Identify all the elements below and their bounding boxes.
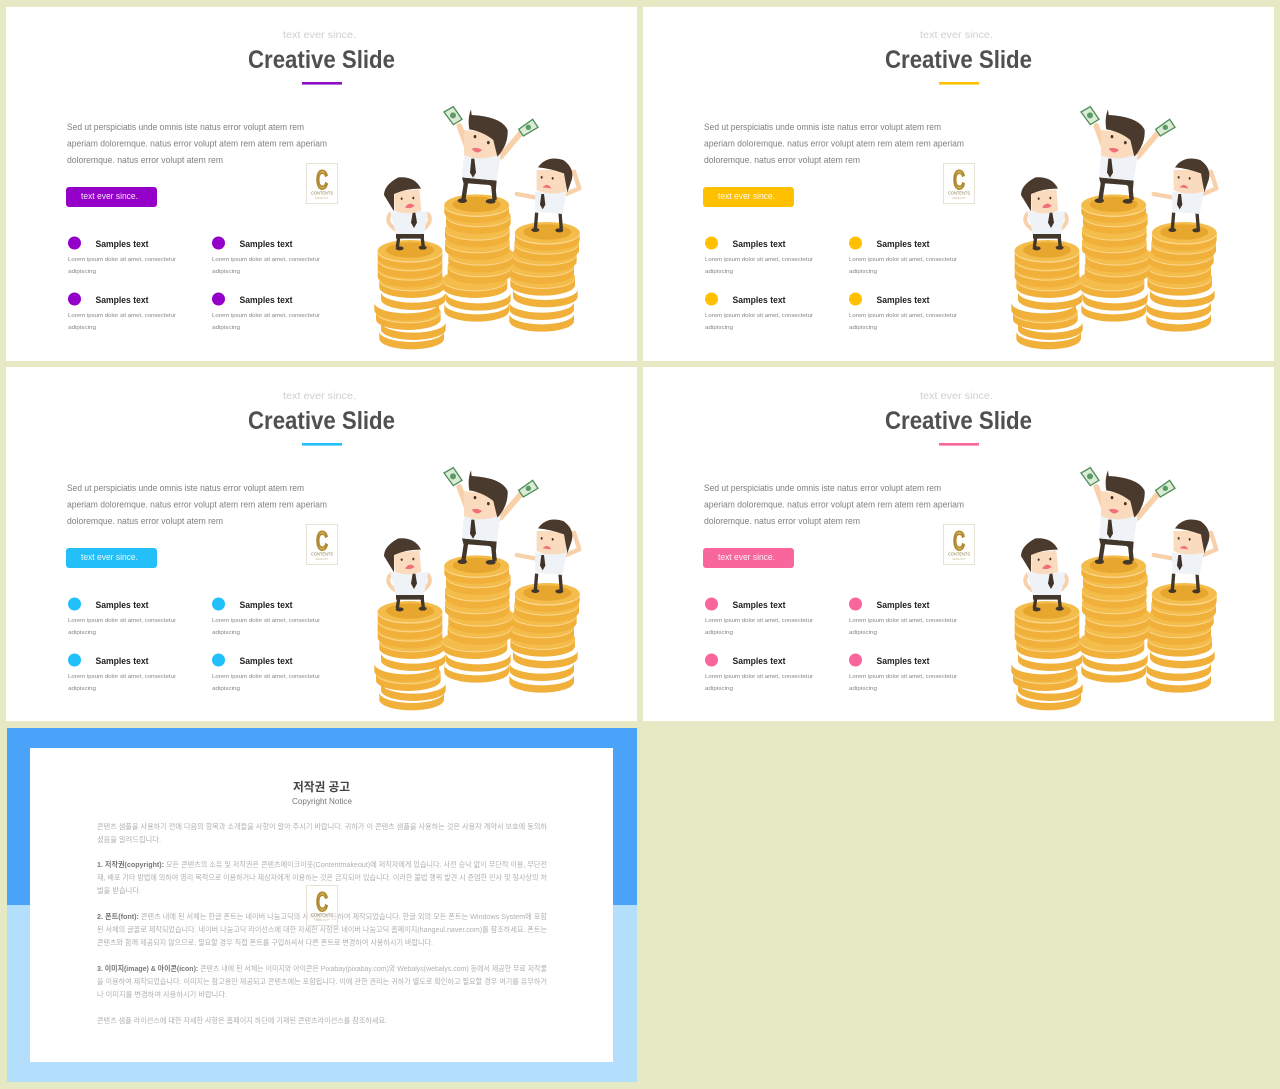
button (703, 548, 794, 568)
item: top left: Samples text (96, 600, 149, 611)
button: text ever since. (718, 190, 775, 201)
logo badge: C (316, 165, 328, 195)
item: top left: Lorem ipsum dolor sit amet, consectetur (705, 257, 813, 263)
button (703, 187, 794, 207)
body text: doloremque. natus error volupt atem rem (704, 515, 860, 526)
subtitle: text ever since. (920, 390, 993, 402)
item: bottom right: adipiscing (849, 686, 877, 692)
item: top right: Lorem ipsum dolor sit amet, consectetur (849, 618, 957, 624)
logo badge: CONTENTS (311, 912, 333, 918)
item: top right: Samples text (240, 239, 293, 250)
body text: aperiam doloremque. natus error volupt atem rem atem rem aperiam (704, 138, 964, 148)
item: bottom right: Lorem ipsum dolor sit amet, consectetur (212, 674, 320, 680)
subtitle: text ever since. (283, 29, 356, 41)
logo badge: CONTENTS (948, 190, 970, 196)
item: top left: Samples text (732, 600, 786, 611)
logo badge (306, 886, 338, 926)
item: top left (705, 598, 813, 636)
item: top left (68, 236, 176, 275)
item: bottom left: Lorem ipsum dolor sit amet, consectetur (705, 313, 813, 319)
item: top right (212, 236, 320, 275)
section 2: font: 2. 폰트(font): 콘텐츠 내에 된 서체는 한글 폰트는 네이버 나눔고딕의 서체를 사용하여 제작되었습니다. 한글 외의 모든 폰트는 Windows System에 포함 (97, 911, 547, 921)
item: top right: adipiscing (212, 269, 240, 275)
item: bottom right (212, 292, 320, 331)
body text: aperiam doloremque. natus error volupt atem rem atem rem aperiam (67, 498, 327, 510)
item: bottom left: Lorem ipsum dolor sit amet, consectetur (68, 313, 176, 319)
body text (704, 482, 964, 526)
title underline (939, 82, 979, 85)
body text (67, 482, 327, 526)
button: text ever since. (81, 551, 138, 562)
item: top right: Lorem ipsum dolor sit amet, consectetur (212, 257, 320, 263)
logo badge: MAKE OUT (952, 197, 966, 200)
copyright subheading: Copyright Notice (292, 796, 352, 806)
logo badge (306, 164, 338, 204)
item: bottom right (849, 292, 957, 331)
illustration: businessmen on coin stacks (1011, 107, 1217, 349)
item: bottom right: Samples text (876, 656, 930, 667)
button: text ever since. (81, 190, 138, 201)
section 1: copyright: 1. 저작권(copyright): 모든 콘텐츠의 소유 및 저작권은 콘텐츠메이크아웃(Contentmakeout)에 저작자에게 있습니다. 사전 승낙 없이 무단적 이용, 무단전 (97, 859, 547, 869)
section 2: font (97, 911, 547, 947)
item: bottom left: adipiscing (705, 325, 733, 331)
item: top left (68, 598, 176, 636)
panel: purple slide (6, 7, 637, 361)
body text: Sed ut perspiciatis unde omnis iste natus error volupt atem rem (704, 121, 941, 132)
illustration: businessmen on coin stacks (1011, 468, 1217, 710)
item: bottom left: Samples text (96, 295, 149, 306)
item: top right: Samples text (240, 600, 293, 611)
item: bottom left: adipiscing (68, 686, 96, 692)
item: bottom left (705, 292, 813, 331)
closing line: 콘텐츠 샘플 라이선스에 대한 자세한 사항은 홈페이지 하단에 기재된 콘텐츠라이선스를 참조하세요. (97, 1015, 387, 1025)
copyright heading: 저작권 공고 (293, 779, 350, 794)
logo badge (306, 524, 338, 564)
logo badge: C (953, 165, 965, 195)
section 2: font: 콘텐츠와 함께 제공되지 않으므로, 필요할 경우 직접 폰트를 구입하셔서 다른 폰트로 변경하여 사용하시기 바랍니다. (97, 937, 433, 947)
item: bottom left: Samples text (732, 656, 786, 667)
logo badge: MAKE OUT (315, 919, 329, 922)
item: top left: Lorem ipsum dolor sit amet, consectetur (68, 618, 176, 624)
intro paragraph (97, 821, 547, 844)
section 2: font: 된 서체의 글꼴로 제작되었습니다. 네이버 나눔고딕 라이선스에 대한 자세한 사항은 네이버 나눔고딕 홈페이지(hangeul.naver.com)를 참조하세요. 폰트는 (97, 924, 547, 934)
item: bottom left (68, 292, 176, 331)
title underline (302, 82, 342, 85)
item: top right: Samples text (876, 600, 930, 611)
section 1: copyright: 재, 배포 기타 방법에 의하여 영리 목적으로 이용하거나 제삼자에게 이용하는 것은 금지되어 있습니다. 이러한 불법 행위 발견 시 준엄한 민사 및 형사상의 처 (97, 872, 547, 882)
item: bottom right: Samples text (240, 656, 293, 667)
logo badge: MAKE OUT (315, 197, 329, 200)
body text: aperiam doloremque. natus error volupt atem rem atem rem aperiam (704, 498, 964, 510)
item: bottom right: Lorem ipsum dolor sit amet, consectetur (849, 313, 957, 319)
item: bottom right (849, 654, 957, 692)
body text: aperiam doloremque. natus error volupt atem rem atem rem aperiam (67, 138, 327, 148)
section 3: image and icon: 나 이미지를 변경하여 사용하시기 바랍니다. (97, 989, 227, 999)
item: top left: adipiscing (68, 630, 96, 636)
item: bottom right: Lorem ipsum dolor sit amet, consectetur (849, 674, 957, 680)
logo badge: CONTENTS (311, 190, 333, 196)
panel: copyright notice (7, 728, 637, 1082)
intro paragraph: 셨음을 알려드립니다. (97, 834, 161, 844)
item: bottom left (68, 654, 176, 692)
item: top left: adipiscing (705, 269, 733, 275)
item: top right (849, 598, 957, 636)
body text (704, 121, 964, 165)
body text: doloremque. natus error volupt atem rem (704, 154, 860, 165)
illustration: businessmen on coin stacks (374, 468, 580, 710)
item: top right: adipiscing (849, 630, 877, 636)
title: Creative Slide (248, 407, 395, 435)
section 3: image and icon: 을 이용하여 제작되었습니다. 이미지는 참고용만 제공되고 콘텐츠에는 포함됩니다. 이에 관한 권리는 귀하가 별도로 확인하고 필요할 경우 여기를 유무하거 (97, 976, 547, 986)
logo badge: MAKE OUT (315, 558, 329, 561)
logo badge: CONTENTS (311, 552, 333, 556)
item: top left: Samples text (96, 239, 149, 250)
item: top right (212, 598, 320, 636)
item: bottom right: adipiscing (849, 325, 877, 331)
intro paragraph: 콘텐츠 샘플을 사용하기 전에 다음의 항목과 소개들을 사항이 알아 주시기 바랍니다. 귀하가 이 콘텐츠 샘플을 사용하는 것은 사용자 계약서 보호에 동의하 (97, 821, 547, 831)
item: bottom right: adipiscing (212, 686, 240, 692)
item: top right: adipiscing (212, 630, 240, 636)
logo badge (944, 524, 974, 564)
logo badge: C (316, 887, 328, 917)
item: bottom left (705, 654, 813, 692)
item: bottom right (212, 654, 320, 692)
subtitle: text ever since. (920, 29, 993, 41)
item: bottom left: adipiscing (68, 325, 96, 331)
item: top left: Lorem ipsum dolor sit amet, consectetur (705, 618, 813, 624)
item: bottom right: Lorem ipsum dolor sit amet, consectetur (212, 313, 320, 319)
body text: Sed ut perspiciatis unde omnis iste natus error volupt atem rem (67, 121, 304, 132)
item: top left (705, 236, 813, 275)
item: top right: Samples text (876, 239, 930, 250)
button (66, 548, 157, 568)
item: bottom right: adipiscing (212, 325, 240, 331)
item: bottom left: Samples text (96, 656, 149, 667)
logo badge: MAKE OUT (952, 558, 966, 561)
section 1: copyright (97, 859, 547, 895)
body text: Sed ut perspiciatis unde omnis iste natus error volupt atem rem (704, 482, 941, 493)
body text: doloremque. natus error volupt atem rem (67, 154, 223, 165)
item: top left: Lorem ipsum dolor sit amet, consectetur (68, 257, 176, 263)
item: top right: Lorem ipsum dolor sit amet, consectetur (212, 618, 320, 624)
item: top right: Lorem ipsum dolor sit amet, consectetur (849, 257, 957, 263)
title underline (302, 443, 342, 446)
section 1: copyright: 벌을 받습니다. (97, 885, 141, 895)
logo badge: C (953, 526, 965, 556)
title: Creative Slide (885, 407, 1032, 435)
logo badge: C (316, 526, 328, 556)
button (66, 187, 157, 207)
item: bottom right: Samples text (876, 295, 930, 306)
body text (67, 121, 327, 165)
title: Creative Slide (248, 46, 395, 74)
illustration: businessmen on coin stacks (374, 107, 580, 349)
body text: Sed ut perspiciatis unde omnis iste natus error volupt atem rem (67, 482, 304, 493)
section 3: image and icon (97, 963, 547, 999)
item: top left: Samples text (732, 239, 786, 250)
subtitle: text ever since. (283, 390, 356, 402)
title: Creative Slide (885, 46, 1032, 74)
item: bottom left: Lorem ipsum dolor sit amet, consectetur (68, 674, 176, 680)
item: bottom left: adipiscing (705, 686, 733, 692)
logo badge (944, 164, 974, 204)
title underline (939, 443, 979, 446)
section 3: image and icon: 3. 이미지(image) & 아이콘(icon): 콘텐츠 내에 된 서체는 이미지와 아이콘은 Pixabay(pixabay.com)와 Webalys(webalys.com) 등에서 제공한 무료 저작물 (97, 963, 547, 973)
item: top left: adipiscing (705, 630, 733, 636)
item: bottom left: Lorem ipsum dolor sit amet, consectetur (705, 674, 813, 680)
item: bottom left: Samples text (732, 295, 786, 306)
logo badge: CONTENTS (948, 552, 970, 556)
item: top left: adipiscing (68, 269, 96, 275)
body text: doloremque. natus error volupt atem rem (67, 515, 223, 526)
item: top right (849, 236, 957, 275)
item: top right: adipiscing (849, 269, 877, 275)
button: text ever since. (718, 551, 775, 562)
item: bottom right: Samples text (240, 295, 293, 306)
panel: pink slide (643, 367, 1274, 721)
panel: blue slide (6, 367, 637, 721)
panel: yellow slide (643, 7, 1274, 361)
